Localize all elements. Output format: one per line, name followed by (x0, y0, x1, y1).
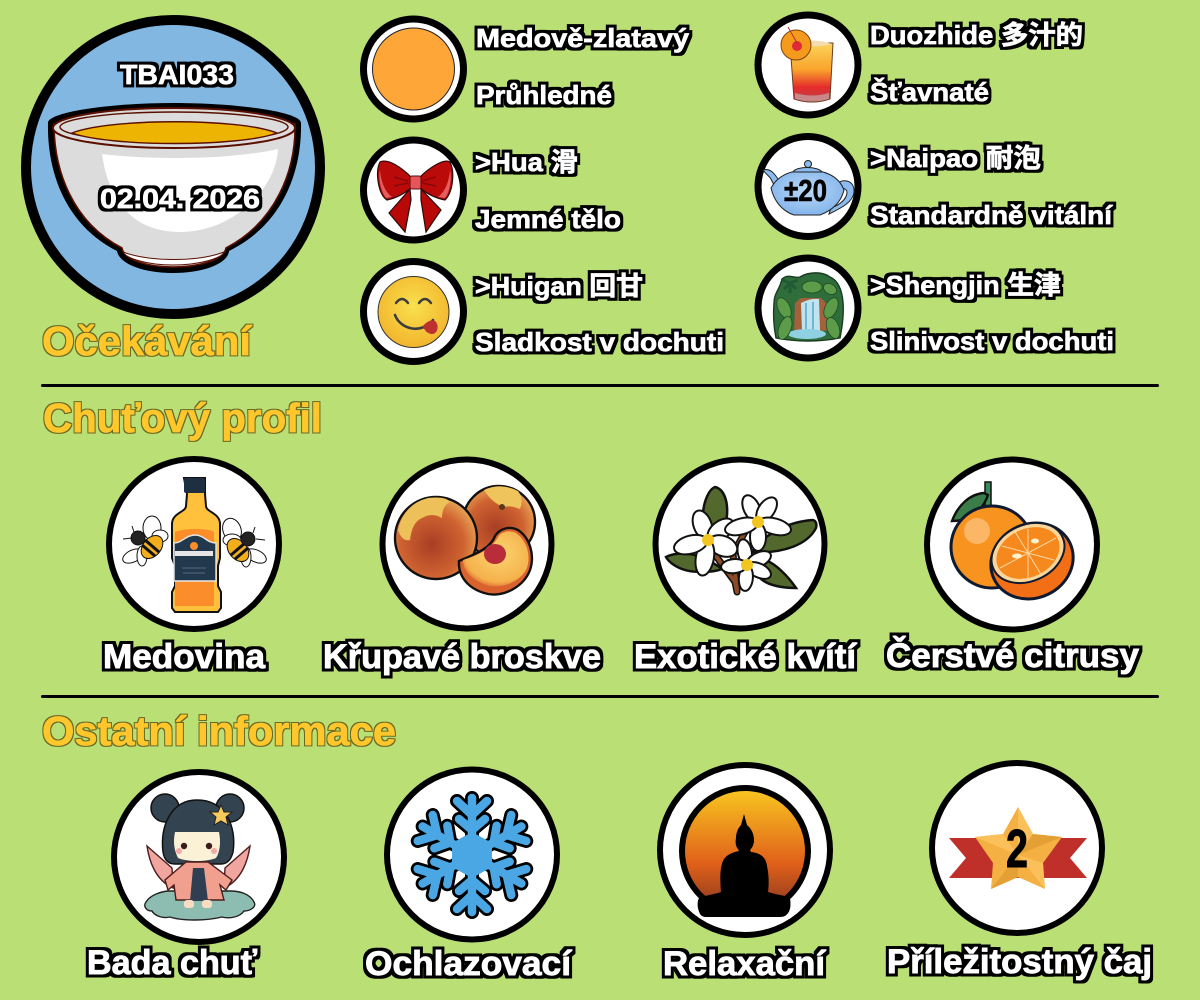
panel: flavour flowers (634, 460, 858, 676)
label: mead: Medovina (103, 638, 266, 676)
icon: mead bottle and bees (109, 459, 279, 629)
icon: smiling face (364, 262, 464, 362)
icon: blue teapot with steep count: ±20 (784, 173, 827, 208)
panel: info relaxing (660, 765, 830, 983)
label: fresh citrus: Čerstvé citrusy (886, 636, 1139, 675)
label: juicy: Šťavnaté (870, 77, 989, 107)
label: smooth body: Jemné tělo (475, 204, 621, 234)
label: relaxing: Relaxační (663, 945, 827, 983)
icon: meditating silhouette at sunset (660, 765, 830, 935)
icon: star with ribbon and number: 2 (1006, 819, 1028, 879)
icon: blue teapot with steep count (758, 136, 858, 236)
label: occasional tea: Příležitostný čaj (887, 943, 1152, 981)
label: exotic flowers: Exotické kvítí (634, 638, 858, 676)
icon: fresh oranges (927, 460, 1097, 630)
label: naipao term: >Naipao 耐泡 (870, 143, 1041, 173)
icon: honey-gold colour swatch (364, 19, 464, 119)
icon: red bow (364, 140, 464, 240)
icon: peaches (382, 460, 552, 628)
panel: info cooling (365, 770, 573, 983)
label: base taste: Bada chuť (87, 944, 258, 982)
date: 02.04. 2026 (100, 183, 260, 214)
panel: flavour peaches (323, 460, 601, 676)
icon: exotic blossoms (656, 460, 824, 628)
label: crisp peaches: Křupavé broskve (323, 638, 601, 676)
label: shengjin term: >Shengjin 生津 (870, 270, 1061, 300)
label: colour: Medově-zlatavý (476, 23, 690, 53)
icon: cocktail glass (758, 15, 858, 115)
label: salivation: Slinivost v dochuti (870, 326, 1114, 356)
heading: other information: Ostatní informace (42, 708, 396, 754)
panel: flavour citrus (886, 460, 1139, 675)
icon: right bee (219, 516, 269, 567)
panel: info base taste (87, 772, 284, 982)
panel: flavour mead (103, 459, 279, 676)
icon: tea bowl badge (26, 20, 320, 314)
panel: info occasional tea (887, 763, 1152, 981)
code: TBAI033 (120, 59, 234, 90)
label: duozhide term: Duozhide 多汁的 (870, 20, 1083, 50)
label: body term: >Hua 滑 (475, 147, 578, 177)
heading: expectation: Očekávání (42, 318, 253, 364)
icon: snowflake (387, 770, 557, 940)
heading: flavour profile: Chuťový profil (43, 395, 322, 441)
icon: left bee (120, 516, 168, 566)
label: huigan term: >Huigan 回甘 (475, 271, 643, 301)
icon: chibi angel girl (114, 772, 284, 942)
label: steeping vitality: Standardně vitální (870, 200, 1113, 230)
icon: jungle waterfall (758, 258, 858, 358)
label: cooling: Ochlazovací (365, 945, 573, 983)
label: clarity: Průhledné (476, 80, 612, 110)
label: sweet aftertaste: Sladkost v dochuti (475, 327, 724, 357)
icon: star with ribbon and number (932, 763, 1102, 933)
panel: expectation (26, 20, 320, 364)
